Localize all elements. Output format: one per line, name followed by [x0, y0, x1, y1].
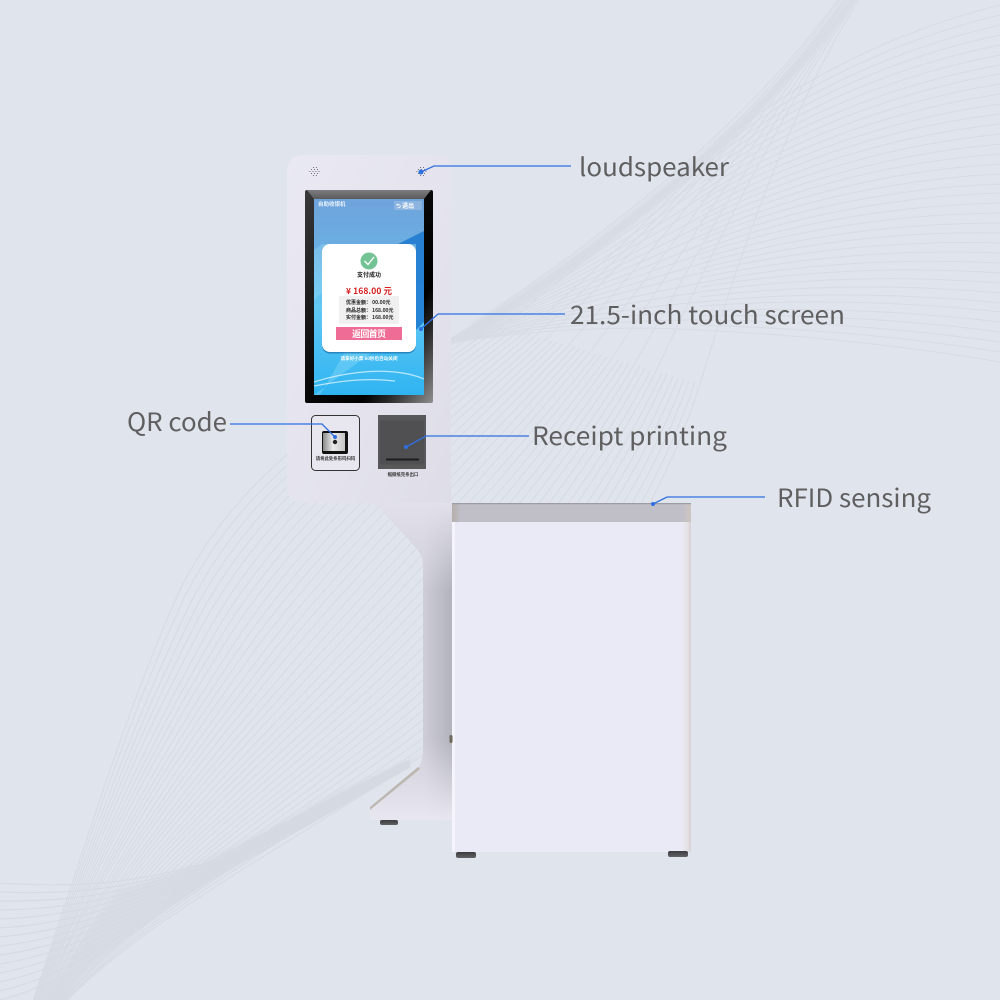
bezel: [305, 190, 433, 403]
success icon: [360, 252, 378, 270]
right foot: [668, 851, 688, 857]
exit button: [394, 201, 422, 210]
scanner caption: 请将此处条形码扫码: [316, 455, 356, 462]
base slope edge: [370, 767, 420, 810]
display: [314, 199, 424, 395]
pillar and base: [370, 503, 453, 820]
top band left corner: [452, 504, 461, 522]
receipt notice: 请拿好小票 60秒后自动关闭: [340, 355, 398, 362]
callout: touch screen: 21.5-inch touch screen: [570, 296, 845, 332]
summary box: 商品总额： 168.00元: [346, 307, 394, 314]
top band: [452, 504, 691, 522]
callout: RFID sensing: RFID sensing: [777, 479, 931, 515]
left foot: [456, 852, 476, 858]
home button: 返回首页: [352, 327, 386, 340]
speaker left: [309, 167, 320, 176]
scanner window: [322, 431, 348, 454]
callout: RFID sensing: [651, 479, 931, 515]
kiosk body: [287, 155, 453, 825]
callout: receipt printing: [404, 417, 727, 453]
callout: QR code: QR code: [127, 403, 227, 439]
amount: ¥ 168.00 元: [346, 285, 392, 297]
speaker right: [416, 167, 427, 176]
success text: 支付成功: [357, 270, 381, 279]
rear foot: [380, 820, 398, 825]
receipt printer: [378, 415, 426, 478]
callout: receipt printing: Receipt printing: [532, 417, 727, 453]
bezel top strip: [307, 190, 431, 199]
summary box: 优惠金额： 00.00元: [346, 299, 391, 306]
printer caption: 缩撕纸完条出口: [388, 471, 418, 478]
callout: QR code: [127, 403, 337, 439]
callout: touch screen: [419, 296, 845, 332]
callout: loudspeaker: [418, 148, 729, 184]
cabinet body: [452, 522, 691, 852]
right edge: [682, 522, 691, 852]
payment card: [322, 244, 416, 354]
screen header: 自助收银机: [318, 200, 346, 208]
callout: loudspeaker: loudspeaker: [579, 148, 729, 184]
storage cabinet: [450, 503, 691, 858]
top band right corner: [682, 504, 691, 522]
summary box: 实付金额： 168.00元: [346, 314, 394, 321]
left edge: [452, 522, 455, 852]
touch screen: [305, 190, 433, 403]
exit button: ⮌ 退出: [396, 201, 414, 210]
summary box: [339, 296, 399, 324]
display decoration: [398, 231, 424, 330]
QR scanner: [312, 416, 360, 470]
left knob: [450, 735, 452, 743]
upper panel: [287, 155, 451, 503]
top edge highlight: [452, 503, 691, 504]
